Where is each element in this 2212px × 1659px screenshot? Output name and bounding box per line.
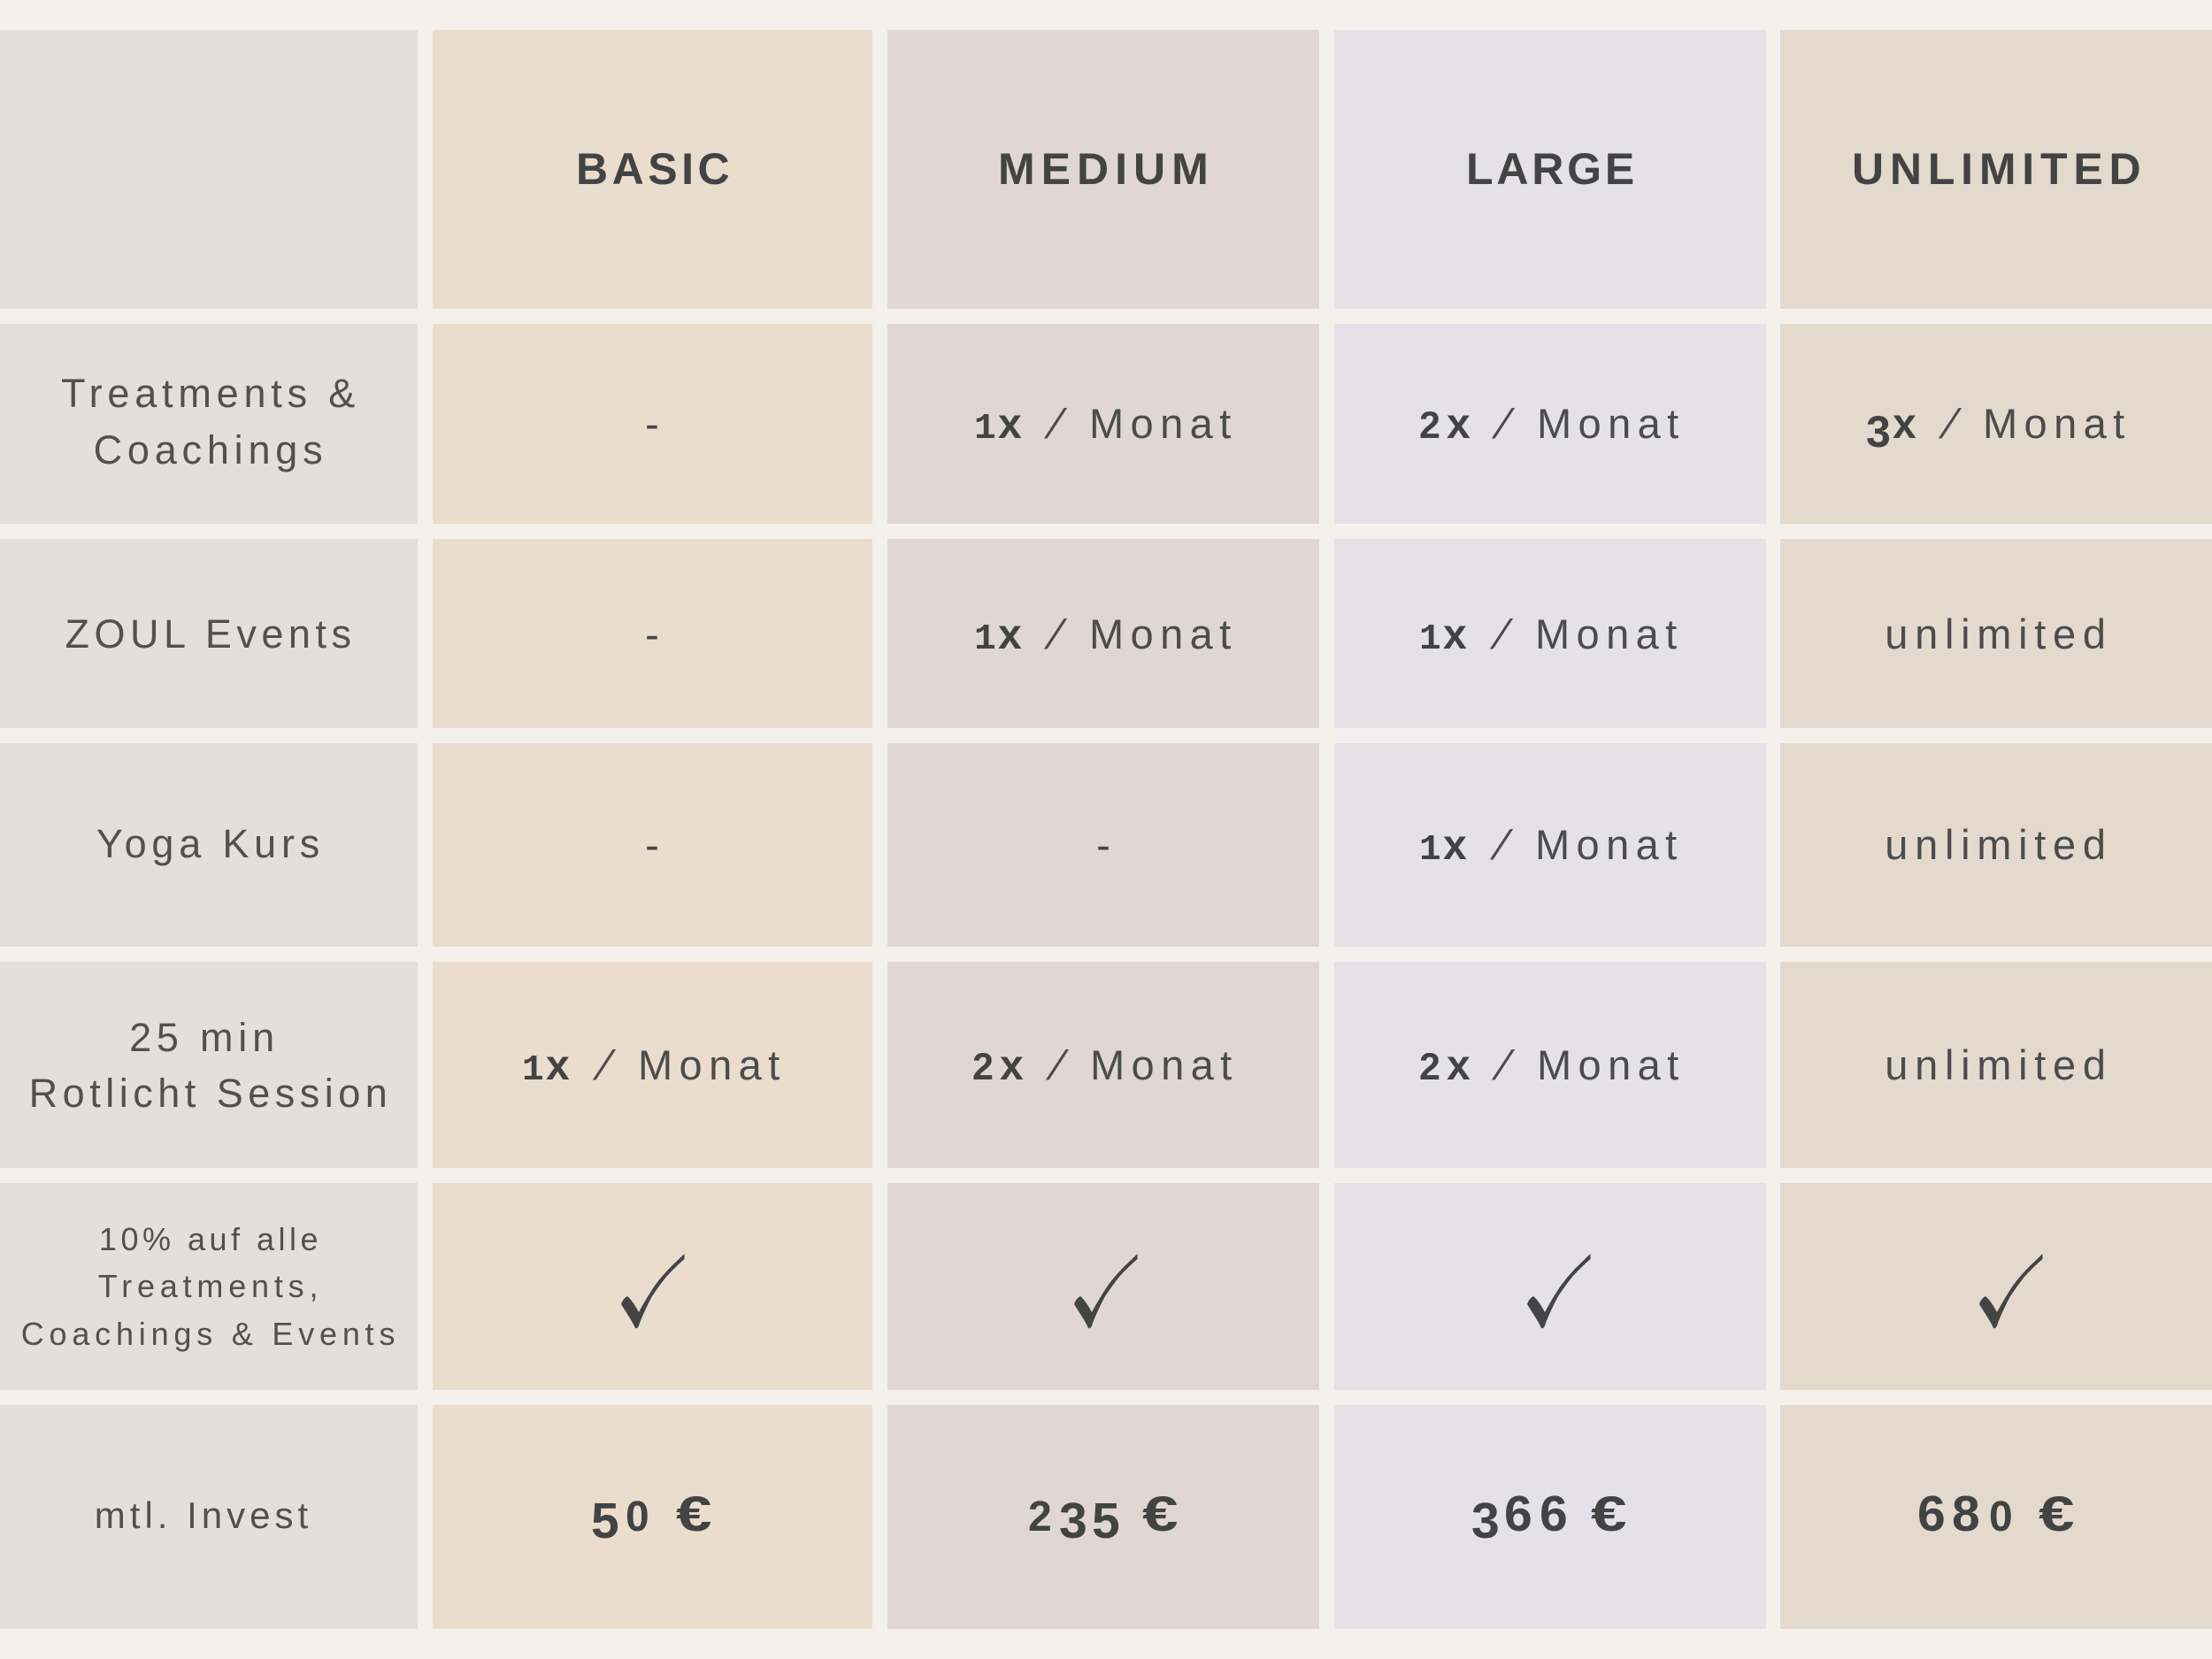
unlimited: unlimited <box>1780 539 2212 728</box>
large: 2x / Monat: / <box>1488 402 1517 448</box>
label: mtl. Invest: mtl. Invest <box>95 1494 312 1536</box>
large: 1x / Monat: 1 <box>1419 619 1441 660</box>
unlimited: 3x / Monat <box>1780 324 2212 524</box>
label: 10% auf alle Treatments, Coachings & Events: Treatments, <box>98 1268 323 1304</box>
header: MEDIUM: MEDIUM <box>998 144 1215 194</box>
label: Yoga Kurs <box>0 743 418 947</box>
basic: 50 euro: 5 <box>591 1493 619 1549</box>
row: Treatments & Coachings <box>0 324 2212 524</box>
medium: 2x / Monat: Monat <box>1090 1041 1239 1088</box>
large: 1x / Monat: x <box>1443 822 1467 869</box>
large: 1x / Monat: Monat <box>1535 611 1684 657</box>
label: Treatments & Coachings <box>0 324 418 524</box>
basic: 1x / Monat: Monat <box>638 1041 787 1088</box>
basic: 50 euro: € <box>676 1486 711 1541</box>
row: ZOUL Events <box>0 539 2212 728</box>
medium: 1x / Monat: Monat <box>1089 611 1238 657</box>
unlimited: unlimited: unlimited <box>1885 1041 2113 1088</box>
basic: none: - <box>645 611 659 657</box>
row: 25 min Rotlicht Session <box>0 962 2212 1168</box>
label: ZOUL Events: ZOUL Events <box>65 611 356 657</box>
medium: 2x / Monat: / <box>1042 1043 1071 1089</box>
unlimited: unlimited: unlimited <box>1885 611 2113 657</box>
large: 2x / Monat: x <box>1447 401 1471 448</box>
large: 366 euro: 6 <box>1504 1486 1532 1542</box>
header: LARGE <box>1334 30 1766 309</box>
label: 10% auf alle Treatments, Coachings & Events <box>0 1183 418 1390</box>
label: 25 min Rotlicht Session <box>0 962 418 1168</box>
unlimited: check mark <box>1780 1183 2212 1390</box>
large: 366 euro: 6 <box>1540 1486 1568 1542</box>
medium: 1x / Monat: x <box>998 401 1022 448</box>
basic: check mark <box>433 1183 872 1390</box>
basic: none: - <box>645 821 659 868</box>
medium: 235 euro: 2 <box>1028 1494 1052 1540</box>
basic: 1x / Monat <box>433 962 872 1168</box>
medium: check mark <box>887 1183 1319 1390</box>
medium: 1x / Monat: Monat <box>1089 400 1238 447</box>
large: 2x / Monat: / <box>1488 1043 1517 1089</box>
row: Yoga Kurs <box>0 743 2212 947</box>
medium: 2x / Monat: 2 <box>972 1046 994 1088</box>
large: 366 euro: 3 <box>1471 1493 1500 1549</box>
large: 1x / Monat: / <box>1486 823 1516 869</box>
label: mtl. Invest <box>0 1405 418 1629</box>
medium: 1x / Monat: / <box>1041 402 1070 448</box>
large: 1x / Monat: Monat <box>1535 821 1684 868</box>
large: 2x / Monat: 2 <box>1419 1046 1440 1088</box>
basic: 1x / Monat: / <box>589 1043 618 1089</box>
basic: none <box>433 743 872 947</box>
medium: 1x / Monat: x <box>998 611 1022 658</box>
medium: 1x / Monat: / <box>1041 612 1070 658</box>
large: 2x / Monat: Monat <box>1537 1041 1686 1088</box>
medium: 2x / Monat: x <box>1000 1042 1024 1089</box>
large: 2x / Monat: Monat <box>1537 400 1686 447</box>
basic: none: - <box>645 400 659 447</box>
basic: 50 euro <box>433 1405 872 1629</box>
unlimited: unlimited <box>1780 743 2212 947</box>
medium: none: - <box>1096 821 1110 868</box>
unlimited: 3x / Monat: Monat <box>1983 400 2131 447</box>
label: 10% auf alle Treatments, Coachings & Events: Coachings & Events <box>21 1316 400 1352</box>
basic: none <box>433 324 872 524</box>
medium: 235 euro: € <box>1142 1486 1178 1541</box>
large: 366 euro: € <box>1591 1486 1626 1541</box>
large: 1x / Monat: / <box>1486 612 1516 658</box>
medium: none <box>887 743 1319 947</box>
large: 1x / Monat <box>1334 743 1766 947</box>
medium: 1x / Monat: 1 <box>974 409 996 449</box>
large: 366 euro <box>1334 1405 1766 1629</box>
large: 1x / Monat: x <box>1443 611 1467 658</box>
header: UNLIMITED <box>1780 30 2212 309</box>
medium: 2x / Monat <box>887 962 1319 1168</box>
unlimited: unlimited: unlimited <box>1885 821 2113 868</box>
header: empty label cell <box>0 30 418 309</box>
large: 1x / Monat: 1 <box>1419 830 1441 871</box>
unlimited: 680 euro: € <box>2039 1486 2074 1541</box>
header: BASIC <box>433 30 872 309</box>
label: 25 min Rotlicht Session: Rotlicht Session <box>29 1071 392 1116</box>
basic: 1x / Monat: x <box>546 1042 570 1089</box>
large: 1x / Monat <box>1334 539 1766 728</box>
medium: 235 euro: 3 <box>1059 1493 1087 1549</box>
header: UNLIMITED: UNLIMITED <box>1852 144 2147 194</box>
label: Yoga Kurs: Yoga Kurs <box>96 821 325 866</box>
header row <box>0 30 2212 309</box>
basic: none <box>433 539 872 728</box>
medium: 1x / Monat <box>887 539 1319 728</box>
row: 10% discount <box>0 1183 2212 1390</box>
medium: 1x / Monat <box>887 324 1319 524</box>
label: 25 min Rotlicht Session: 25 min <box>129 1015 280 1060</box>
unlimited: 3x / Monat: / <box>1935 402 1964 448</box>
large: check mark <box>1334 1183 1766 1390</box>
large: 2x / Monat: x <box>1447 1042 1471 1089</box>
unlimited: 680 euro: 0 <box>1989 1494 2013 1540</box>
large: 2x / Monat: 2 <box>1419 404 1440 447</box>
header: MEDIUM <box>887 30 1319 309</box>
unlimited: 680 euro <box>1780 1405 2212 1629</box>
label: ZOUL Events <box>0 539 418 728</box>
large: 2x / Monat <box>1334 962 1766 1168</box>
unlimited: 680 euro: 8 <box>1952 1486 1980 1542</box>
header: BASIC: BASIC <box>576 144 733 194</box>
label: 10% auf alle Treatments, Coachings & Events: 10% auf alle <box>99 1221 322 1257</box>
label: Treatments & Coachings: Coachings <box>94 427 327 472</box>
header: LARGE: LARGE <box>1466 144 1638 194</box>
medium: 1x / Monat: 1 <box>974 619 996 660</box>
basic: 1x / Monat: 1 <box>522 1050 544 1091</box>
label: Treatments & Coachings: Treatments & <box>61 371 360 416</box>
basic: 50 euro: 0 <box>626 1494 649 1540</box>
unlimited: unlimited <box>1780 962 2212 1168</box>
unlimited: 3x / Monat: x <box>1893 401 1916 448</box>
medium: 235 euro: 5 <box>1092 1493 1120 1549</box>
large: 2x / Monat <box>1334 324 1766 524</box>
unlimited: 680 euro: 6 <box>1917 1486 1946 1542</box>
row: mtl. Invest <box>0 1405 2212 1629</box>
unlimited: 3x / Monat: 3 <box>1866 407 1891 457</box>
medium: 235 euro <box>887 1405 1319 1629</box>
